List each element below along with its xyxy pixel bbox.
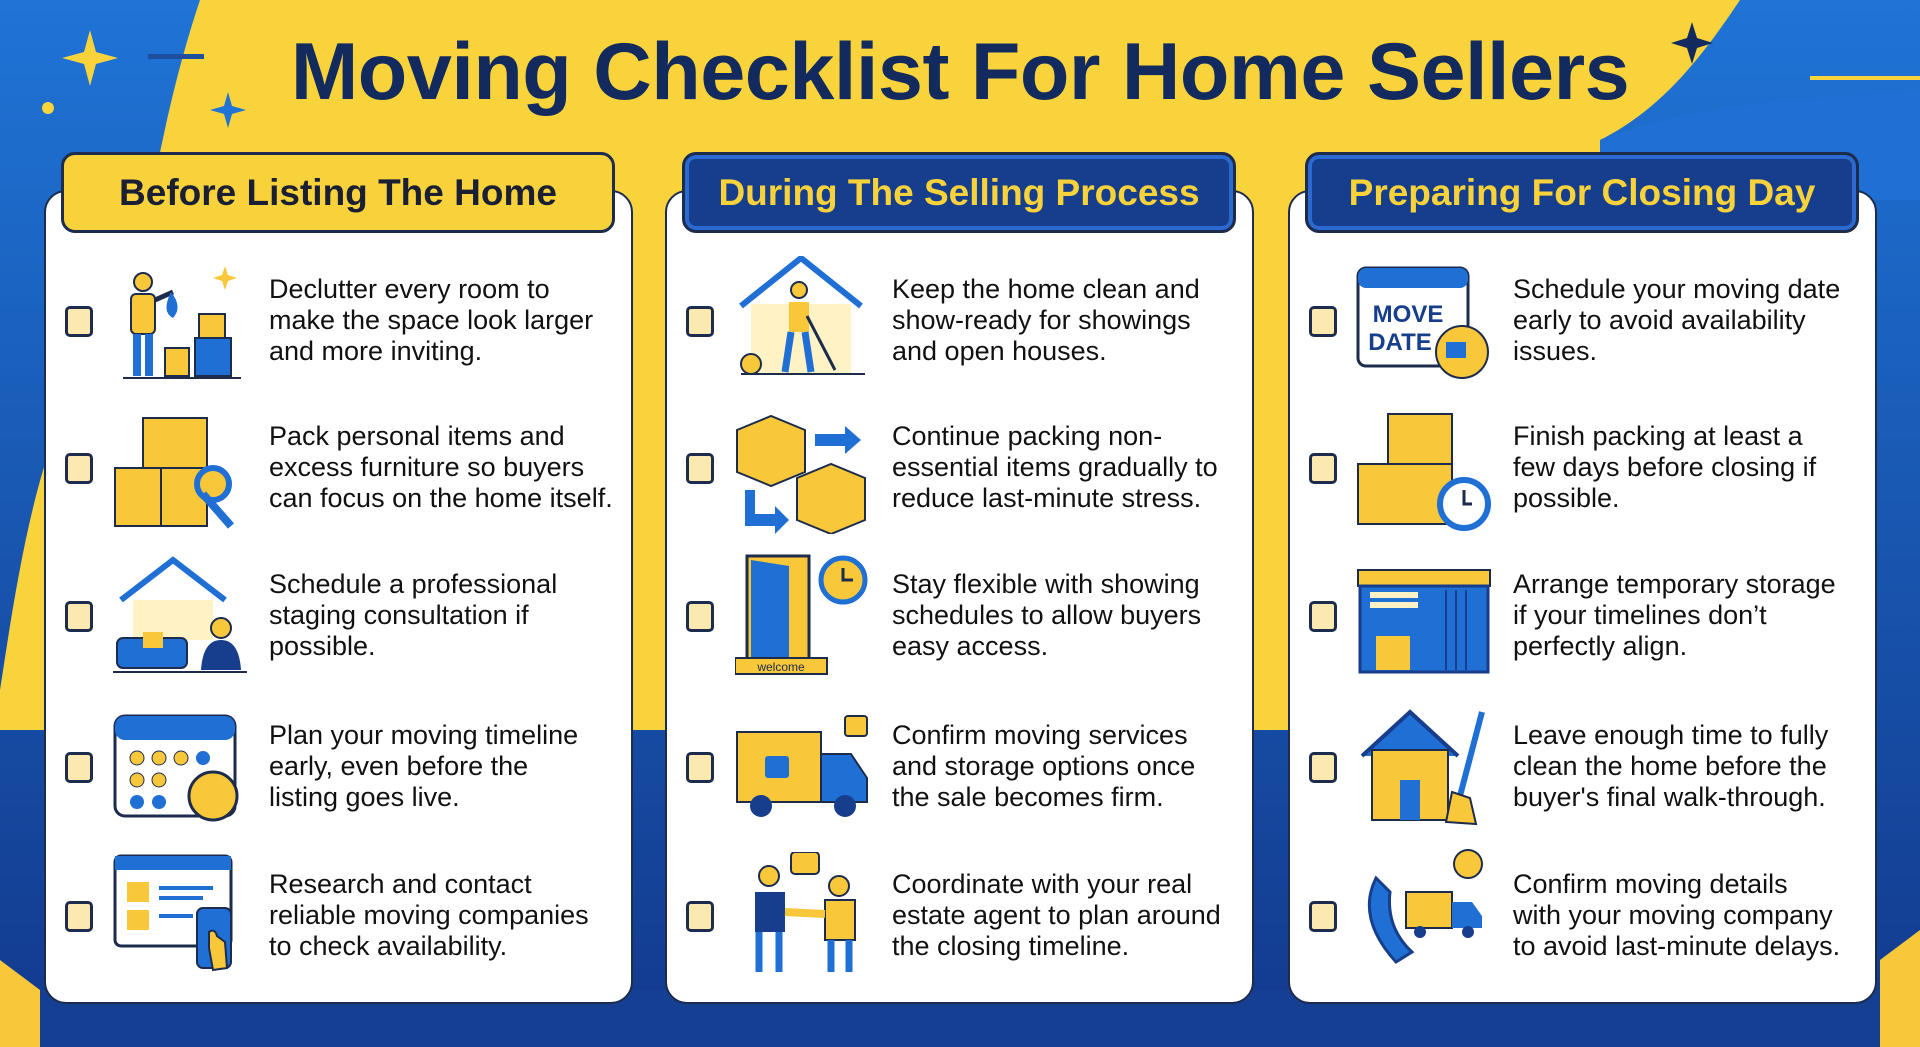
text: keep clean: Keep the home clean and (892, 274, 1200, 304)
text: confirm details: with your moving company (1513, 900, 1833, 930)
text: coordinate: Coordinate with your real (892, 869, 1192, 899)
text: research: Research and contact (269, 869, 532, 899)
text: confirm details: to avoid last-minute delays. (1513, 931, 1840, 961)
icon: pack (114, 417, 234, 528)
text: coordinate: estate agent to plan around (892, 900, 1221, 930)
heading: during selling (682, 152, 1236, 233)
text: keep clean (892, 274, 1200, 366)
text: research: to check availability. (269, 931, 507, 961)
icon: calendar (114, 714, 238, 822)
text: clean before walk: Leave enough time to fully (1513, 720, 1828, 750)
icon: clean house (1360, 709, 1485, 826)
text: confirm details: Confirm moving details (1513, 869, 1788, 899)
text: flexible (892, 569, 1201, 661)
text: confirm services: and storage options once (892, 751, 1195, 781)
panel: closing day (1288, 190, 1877, 1004)
text: pack: Pack personal items and (269, 421, 565, 451)
text: clean before walk: clean the home before the (1513, 751, 1827, 781)
text: flexible: schedules to allow buyers (892, 600, 1201, 630)
text: schedule date: Schedule your moving date (1513, 274, 1840, 304)
text: storage (1513, 569, 1836, 661)
text: continue packing: essential items gradually to (892, 452, 1218, 482)
heading: before listing (61, 152, 615, 233)
text: schedule date (1513, 274, 1840, 366)
text: pack: can focus on the home itself. (269, 483, 613, 513)
text: timeline: early, even before the (269, 751, 528, 781)
text: finish packing: Finish packing at least a (1513, 421, 1803, 451)
icon: storage (1357, 569, 1491, 674)
icon: staging (113, 556, 247, 673)
text: confirm services (892, 720, 1195, 812)
icon: boxes stopwatch (1357, 413, 1491, 531)
text: timeline: listing goes live. (269, 782, 460, 812)
panel: before listing (44, 190, 633, 1004)
text: coordinate: the closing timeline. (892, 931, 1129, 961)
text: schedule date: early to avoid availability (1513, 305, 1806, 335)
checkboxes column 3 (1309, 306, 1337, 932)
text: timeline: Plan your moving timeline (269, 720, 578, 750)
heading: closing day: Preparing For Closing Day (1349, 172, 1815, 213)
text: staging: Schedule a professional (269, 569, 557, 599)
text: flexible: easy access. (892, 631, 1048, 661)
text: declutter (269, 274, 593, 366)
text: timeline (269, 720, 578, 812)
text: storage: if your timelines don’t (1513, 600, 1767, 630)
text: coordinate (892, 869, 1221, 961)
text: research (269, 869, 589, 961)
text: finish packing: possible. (1513, 483, 1620, 513)
text: continue packing (892, 421, 1218, 513)
icon: handshake (755, 852, 856, 972)
heading: closing day (1305, 152, 1859, 233)
text: continue packing: reduce last-minute stress. (892, 483, 1201, 513)
checkboxes column 1 (65, 306, 93, 932)
text: keep clean: and open houses. (892, 336, 1107, 366)
text: keep clean: show-ready for showings (892, 305, 1191, 335)
text: confirm services: Confirm moving services (892, 720, 1188, 750)
text: confirm services: the sale becomes firm. (892, 782, 1164, 812)
icon: phone truck (1368, 849, 1483, 964)
icon: door (735, 554, 868, 675)
icon: declutter (123, 266, 241, 379)
icon: door: welcome (756, 660, 805, 674)
text: storage: perfectly align. (1513, 631, 1687, 661)
icon: move date: MOVE (1373, 301, 1443, 328)
text: declutter: Declutter every room to (269, 274, 550, 304)
text: declutter: and more inviting. (269, 336, 482, 366)
title: Moving Checklist For Home Sellers (291, 27, 1629, 117)
text: clean before walk (1513, 720, 1828, 812)
text: clean before walk: buyer's final walk-through. (1513, 782, 1826, 812)
checkboxes column 2 (686, 306, 714, 932)
heading: before listing: Before Listing The Home (119, 172, 557, 213)
heading: during selling: During The Selling Process (718, 172, 1200, 213)
panel: during selling (665, 190, 1254, 1004)
text: storage: Arrange temporary storage (1513, 569, 1836, 599)
text: pack (269, 421, 613, 513)
text: confirm details (1513, 869, 1840, 961)
icon: move date: DATE (1368, 329, 1432, 356)
text: flexible: Stay flexible with showing (892, 569, 1200, 599)
text: pack: excess furniture so buyers (269, 452, 584, 482)
text: research: reliable moving companies (269, 900, 589, 930)
text: staging: staging consultation if (269, 600, 529, 630)
icon: boxes arrows (736, 414, 866, 534)
icon: move date (1356, 266, 1489, 379)
text: continue packing: Continue packing non- (892, 421, 1162, 451)
text: declutter: make the space look larger (269, 305, 593, 335)
text: schedule date: issues. (1513, 336, 1597, 366)
text: finish packing: few days before closing if (1513, 452, 1816, 482)
text: staging: possible. (269, 631, 376, 661)
icon: cleaning house (739, 256, 865, 375)
icon: truck lock (736, 715, 868, 817)
text: staging (269, 569, 557, 661)
icon: research (114, 854, 232, 972)
text: finish packing (1513, 421, 1816, 513)
